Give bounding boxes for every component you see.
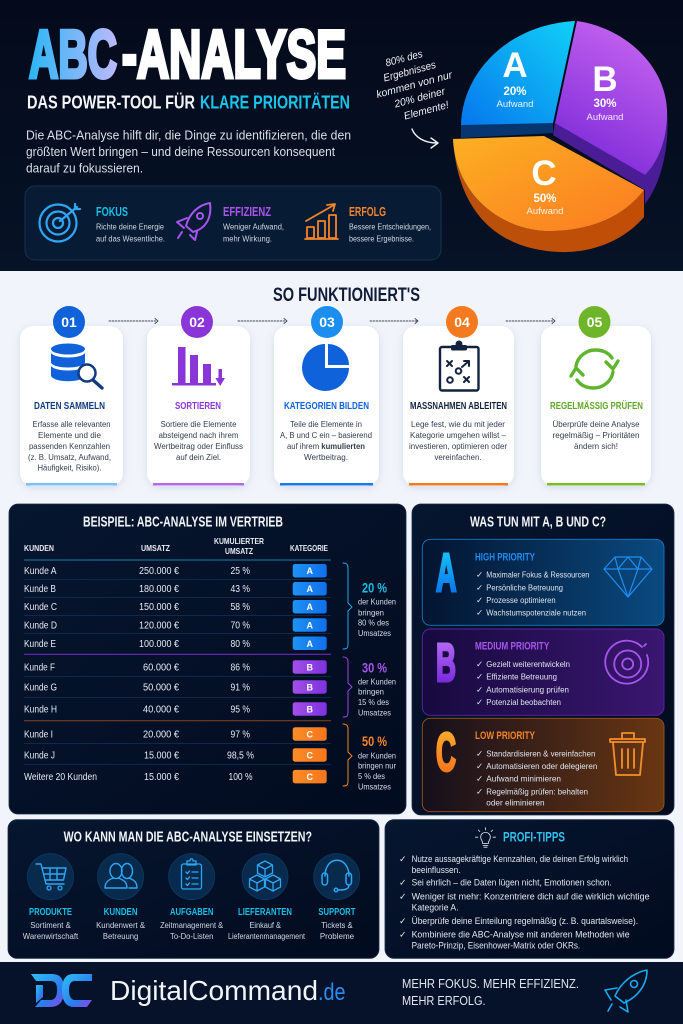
handwritten note: 80% des: [384, 48, 425, 69]
rows: category B: B: [306, 682, 313, 692]
card: C low priority: oder eliminieren: [486, 798, 545, 808]
benefit: Erfolg: [349, 205, 431, 244]
rows: category C: C: [306, 730, 313, 740]
icon: trash can: [610, 733, 645, 775]
step 5 card: 05: [587, 314, 602, 330]
step 1 card: Häufigkeit, Risiko).: [38, 464, 102, 472]
logo wordmark: .de: [318, 979, 346, 1006]
logo mark: [31, 974, 92, 1007]
rows: category A: 25 %: [230, 566, 250, 577]
rows: category A: 58 %: [230, 602, 250, 613]
tips list: Nutze aussagekräftige Kennzahlen, die deinen Erfolg wirklich: [412, 854, 628, 864]
step 3 card: auf ihrem kumulierten: [287, 442, 365, 451]
rows: category B: Kunde H: [24, 704, 57, 716]
rows: category B: 40.000 €: [143, 704, 179, 716]
slice C: C: [531, 154, 557, 193]
tips list: ✓: [399, 891, 406, 901]
rows: category B: Kunde G: [24, 682, 57, 694]
use case: products: Warenwirtschaft: [23, 932, 79, 941]
handwritten note: Elemente!: [403, 99, 450, 122]
step 5 card: [541, 306, 651, 486]
icon: light bulb: [476, 828, 496, 847]
use case: products: [23, 854, 79, 941]
flow arrows: [109, 318, 555, 324]
slice B: Aufwand: [587, 112, 623, 123]
rows: category A: A: [306, 620, 313, 630]
column headers: UMSATZ: [141, 543, 170, 553]
step 4 card: investieren, optimieren oder: [409, 442, 507, 451]
tips list: Kombiniere die ABC-Analyse mit anderen Methoden wie: [412, 930, 630, 940]
rows: category A: A: [306, 566, 313, 576]
step 2 card: Wertbeitrag oder Einfluss: [154, 442, 243, 451]
tagline: [402, 976, 579, 1008]
use case: tasks: [160, 854, 224, 941]
intro text: Die ABC-Analyse hilft dir, die Dinge zu identifizieren, die den: [26, 128, 351, 142]
rows: category C: 98,5 %: [227, 750, 254, 762]
panel heading: WO KANN MAN DIE ABC-ANALYSE EINSETZEN?: [64, 830, 312, 846]
rows: category B: B: [306, 704, 313, 714]
brace: category B summary: Umsatzes: [358, 709, 391, 718]
tips list: Überprüfe deine Einteilung regelmäßig (z. B. quartalsweise).: [412, 916, 638, 926]
brace: category C summary: [343, 724, 396, 792]
rows: category A: 250.000 €: [139, 566, 179, 577]
rows: category C: 97 %: [230, 730, 250, 740]
pie chart: [453, 21, 668, 252]
title: ABC: [29, 16, 117, 92]
rows: category C: C: [306, 772, 313, 782]
card: A high priority: Prozesse optimieren: [486, 595, 556, 605]
rows: category C: C: [306, 750, 313, 760]
step 3 card: [274, 306, 379, 486]
icon: diamond: [604, 557, 652, 597]
card: B medium priority: ✓: [476, 684, 483, 694]
tips list: ✓: [399, 916, 406, 926]
card: A high priority: Maximaler Fokus & Ressourcen: [486, 570, 589, 580]
slice A: A: [502, 46, 528, 85]
rows: category C: Kunde J: [24, 750, 55, 762]
card: C low priority: Regelmäßig prüfen: behalten: [486, 786, 588, 796]
rows: category A: Kunde D: [24, 620, 57, 632]
step 2 card: SORTIEREN: [175, 401, 221, 412]
card: A high priority: ✓: [476, 595, 483, 605]
title: [29, 16, 346, 92]
column headers: UMSATZ: [225, 546, 253, 556]
brace: category B summary: der Kunden: [358, 677, 396, 686]
card: C low priority: LOW PRIORITY: [475, 730, 535, 742]
icon: cycle: [571, 350, 618, 388]
use case: customers: KUNDEN: [104, 906, 138, 918]
icon: clipboard plan: [440, 340, 478, 390]
rows: category A: 150.000 €: [139, 602, 179, 613]
intro text: [26, 128, 351, 176]
tips list: beeinflussen.: [412, 865, 461, 875]
benefit: Erfolg: bessere Ergebnisse.: [349, 234, 414, 244]
step 5 card: REGELMÄSSIG PRÜFEN: [550, 399, 643, 412]
benefit: Erfolg: Bessere Entscheidungen,: [349, 222, 431, 232]
benefit: Erfolg: ERFOLG: [349, 205, 386, 219]
step 1 card: [20, 306, 123, 486]
card: C low priority: [422, 718, 664, 812]
panel: where to use: [8, 820, 379, 958]
rows: category C: Kunde I: [24, 730, 53, 740]
slice C: Aufwand: [527, 206, 563, 217]
slice A: [461, 21, 575, 138]
card: C low priority: ✓: [476, 786, 483, 796]
rows: category C: 15.000 €: [144, 750, 179, 762]
brace: category A summary: bringen: [358, 608, 384, 617]
heading: SO FUNKTIONIERT'S: [273, 285, 420, 306]
card: A high priority: A: [436, 543, 456, 603]
step 4 card: Kategorie umgehen willst –: [410, 431, 507, 440]
table heading: BEISPIEL: ABC-ANALYSE IM VERTRIEB: [83, 514, 283, 530]
rows: category C: 20.000 €: [143, 730, 179, 740]
slice B: 30%: [593, 98, 617, 110]
step 3 card: A, B und C ein – basierend: [280, 431, 372, 440]
brace: category C summary: 5 % des: [358, 772, 385, 781]
step 3 card: Wertbeitrag.: [304, 453, 348, 462]
icon: pie: [302, 344, 349, 391]
title: -ANALYSE: [122, 16, 346, 92]
rows: category A: 43 %: [230, 584, 250, 595]
benefit: Fokus: Richte deine Energie: [96, 222, 164, 232]
handwritten note: 20% deiner: [392, 85, 447, 111]
step 5 card: regelmäßig – Prioritäten: [552, 431, 640, 440]
card: C low priority: Standardisieren & vereinfachen: [486, 748, 595, 758]
card: C low priority: ✓: [476, 761, 483, 771]
step 1 card: passenden Kennzahlen: [29, 442, 110, 451]
slice B: B: [592, 60, 618, 99]
step 1 card: Erfasse alle relevanten: [32, 420, 110, 429]
card: C low priority: ✓: [476, 774, 483, 784]
rows: category A: Kunde E: [24, 639, 56, 650]
rows: category A: 180.000 €: [139, 584, 179, 595]
step 4 card: [403, 306, 514, 486]
use case: support: SUPPORT: [318, 906, 356, 918]
card: A high priority: ✓: [476, 608, 483, 618]
brace: category A summary: der Kunden: [358, 598, 396, 607]
slice A: 20%: [503, 86, 527, 98]
panel: what to do with A, B, C: [412, 504, 674, 815]
card: A high priority: ✓: [476, 570, 483, 580]
brace: category B summary: 30 %: [362, 660, 387, 676]
handwritten note: Ergebnisses: [382, 59, 438, 84]
brace: category A summary: 80 % des: [358, 619, 389, 628]
step 4 card: 04: [454, 314, 470, 330]
panel: sales example table: [9, 504, 406, 814]
rows: category A: A: [306, 584, 313, 594]
benefit: Effizienz: [223, 205, 284, 244]
brace: category A summary: 20 %: [362, 580, 387, 596]
rows: category C: [24, 727, 327, 783]
slice B: [553, 21, 668, 204]
card: B medium priority: MEDIUM PRIORITY: [475, 641, 550, 653]
use case: customers: Kundenwert &: [96, 921, 146, 930]
tips list: [399, 854, 650, 951]
step 2 card: absteigend nach ihrem: [158, 431, 239, 440]
column headers: KUMULIERTER: [214, 536, 264, 546]
use case: support: Probleme: [320, 932, 355, 941]
benefit: Effizienz: mehr Wirkung.: [223, 234, 272, 244]
use case: suppliers: [228, 854, 306, 941]
icon: sorted bars: [172, 347, 225, 386]
header section: [0, 0, 683, 271]
use case: tasks: AUFGABEN: [170, 906, 213, 918]
tagline: MEHR ERFOLG.: [402, 993, 486, 1008]
section: how it works: [20, 285, 651, 486]
use case: support: Tickets &: [321, 921, 353, 930]
step 5 card: Überprüfe deine Analyse: [552, 420, 640, 429]
card: B medium priority: Effiziente Betreuung: [486, 672, 557, 682]
card: B medium priority: Gezielt weiterentwickeln: [486, 659, 570, 669]
brace: category C summary: 50 %: [362, 733, 387, 749]
icon: growth chart: [305, 204, 338, 239]
footer: [0, 962, 683, 1024]
use case: suppliers: Lieferantenmanagement: [228, 932, 306, 941]
use case: products: PRODUKTE: [29, 906, 72, 918]
icon: target: [605, 641, 648, 684]
rows: category A: A: [306, 602, 313, 612]
card: C low priority: Automatisieren oder delegieren: [486, 761, 597, 771]
card: A high priority: Wachstumspotenziale nutzen: [486, 608, 586, 618]
card: A high priority: Persönliche Betreuung: [486, 582, 563, 592]
card: A high priority: ✓: [476, 582, 483, 592]
icon: rocket: [605, 970, 647, 1012]
tips list: Sei ehrlich – die Daten lügen nicht, Emotionen schon.: [412, 878, 612, 888]
rows: category C: 100 %: [228, 772, 253, 783]
step 1 card: 01: [61, 314, 77, 330]
handwritten note: kommen von nur: [375, 69, 454, 101]
rows: category A: 120.000 €: [139, 620, 179, 632]
rows: category A: Kunde C: [24, 602, 57, 613]
card: A high priority: HIGH PRIORITY: [475, 551, 535, 563]
rows: category A: 100.000 €: [139, 639, 179, 650]
step 2 card: Sortiere die Elemente: [160, 420, 237, 429]
use case: tasks: To-Do-Listen: [170, 932, 213, 941]
card: B medium priority: B: [436, 633, 456, 693]
column headers: KATEGORIE: [290, 543, 328, 553]
tagline: MEHR FOKUS. MEHR EFFIZIENZ.: [402, 976, 579, 991]
benefit: Fokus: [96, 205, 165, 244]
brace: category C summary: Umsatzes: [358, 783, 391, 792]
column headers: [24, 536, 328, 556]
subtitle: DAS POWER-TOOL FÜR: [27, 92, 195, 112]
logo wordmark: DigitalCommand: [110, 975, 318, 1006]
card: C low priority: ✓: [476, 748, 483, 758]
subtitle: KLARE PRIORITÄTEN: [200, 92, 350, 112]
rows: category A: 70 %: [230, 620, 250, 632]
benefit: Effizienz: EFFIZIENZ: [223, 205, 271, 219]
tips list: ✓: [399, 854, 406, 864]
tips list: ✓: [399, 878, 406, 888]
icon: rocket: [177, 203, 210, 240]
step 1 card: Elemente und die: [38, 431, 102, 440]
tips list: Weniger ist mehr: Konzentriere dich auf die wirklich wichtige: [412, 891, 650, 901]
rows: category B: 50.000 €: [143, 682, 179, 694]
column headers: KUNDEN: [24, 543, 54, 553]
card: B medium priority: Automatisierung prüfen: [486, 684, 569, 694]
use case: suppliers: LIEFERANTEN: [238, 906, 292, 918]
benefit: Fokus: FOKUS: [96, 205, 128, 219]
step 4 card: MASSNAHMEN ABLEITEN: [410, 401, 507, 412]
panel: pro tips: [385, 820, 674, 958]
rows: category B: [24, 660, 327, 716]
icon: database: [51, 344, 102, 388]
rows: category B: 95 %: [230, 704, 250, 716]
step 4 card: vereinfachen.: [434, 453, 482, 462]
step 5 card: ändern sich!: [574, 442, 618, 451]
intro text: größten Wert bringen – und deine Ressourcen konsequent: [26, 144, 335, 159]
step 2 card: 02: [189, 314, 205, 330]
step 3 card: KATEGORIEN BILDEN: [284, 401, 369, 412]
rows: category A: Kunde A: [24, 566, 57, 577]
brace: category C summary: bringen nur: [358, 762, 396, 771]
tips list: Pareto-Prinzip, Eisenhower-Matrix oder OKRs.: [412, 941, 580, 951]
rows: category B: Kunde F: [24, 662, 55, 674]
rows: category B: 60.000 €: [143, 662, 179, 674]
rows: category A: A: [306, 639, 313, 649]
subtitle: [27, 92, 350, 112]
step 2 card: [147, 306, 250, 486]
rows: category B: 86 %: [230, 662, 250, 674]
brace: category C summary: der Kunden: [358, 751, 396, 760]
card: B medium priority: Potenzial beobachten: [486, 697, 561, 707]
card: C low priority: C: [436, 722, 456, 782]
rows: category A: 80 %: [230, 639, 250, 650]
use case: suppliers: Einkauf &: [249, 921, 282, 930]
panel heading: WAS TUN MIT A, B UND C?: [470, 514, 606, 531]
rows: category A: [24, 564, 327, 650]
slice C: [453, 136, 644, 252]
rows: category B: 91 %: [230, 682, 250, 694]
rows: category C: 15.000 €: [144, 772, 179, 783]
tips list: ✓: [399, 930, 406, 940]
slice A: Aufwand: [497, 99, 533, 110]
use case: products: Sortiment &: [30, 921, 71, 930]
panel heading: PROFI-TIPPS: [503, 829, 565, 845]
brace: category A summary: [343, 563, 396, 649]
benefit: Fokus: auf das Wesentliche.: [96, 234, 165, 244]
card: C low priority: Aufwand minimieren: [486, 774, 561, 784]
card: B medium priority: ✓: [476, 697, 483, 707]
tips list: Kategorie A.: [412, 902, 459, 912]
handwritten note: [368, 42, 461, 128]
rows: category A: Kunde B: [24, 584, 56, 595]
brace: category A summary: Umsatzes: [358, 629, 391, 638]
brace: category B summary: bringen: [358, 688, 384, 697]
rows: category B: B: [306, 662, 313, 672]
intro text: darauf zu fokussieren.: [26, 160, 143, 176]
card: A high priority: [422, 539, 664, 625]
rows: category C: Weitere 20 Kunden: [24, 772, 97, 783]
benefit: Effizienz: Weniger Aufwand,: [223, 222, 284, 232]
use case: support: [314, 854, 360, 941]
slice C: 50%: [533, 193, 557, 205]
brace: category B summary: 15 % des: [358, 698, 389, 707]
card: B medium priority: ✓: [476, 672, 483, 682]
brace: category B summary: [343, 657, 396, 718]
table rules: [24, 560, 331, 764]
use case: customers: Betreuung: [103, 932, 138, 941]
step 1 card: DATEN SAMMELN: [34, 401, 105, 412]
use case: customers: [96, 854, 146, 941]
arrow to pie: [412, 129, 438, 148]
step 1 card: (z. B. Umsatz, Aufwand,: [28, 453, 111, 462]
panel: benefits: [25, 186, 441, 260]
icon: target: [40, 204, 80, 242]
use case: tasks: Zeitmanagement &: [160, 921, 224, 930]
card: B medium priority: ✓: [476, 659, 483, 669]
step 4 card: Lege fest, wie du mit jeder: [411, 420, 505, 429]
card: B medium priority: [422, 629, 664, 715]
step 2 card: auf dein Ziel.: [176, 453, 221, 462]
step 3 card: Teile die Elemente in: [290, 420, 362, 429]
step 3 card: 03: [319, 314, 335, 330]
